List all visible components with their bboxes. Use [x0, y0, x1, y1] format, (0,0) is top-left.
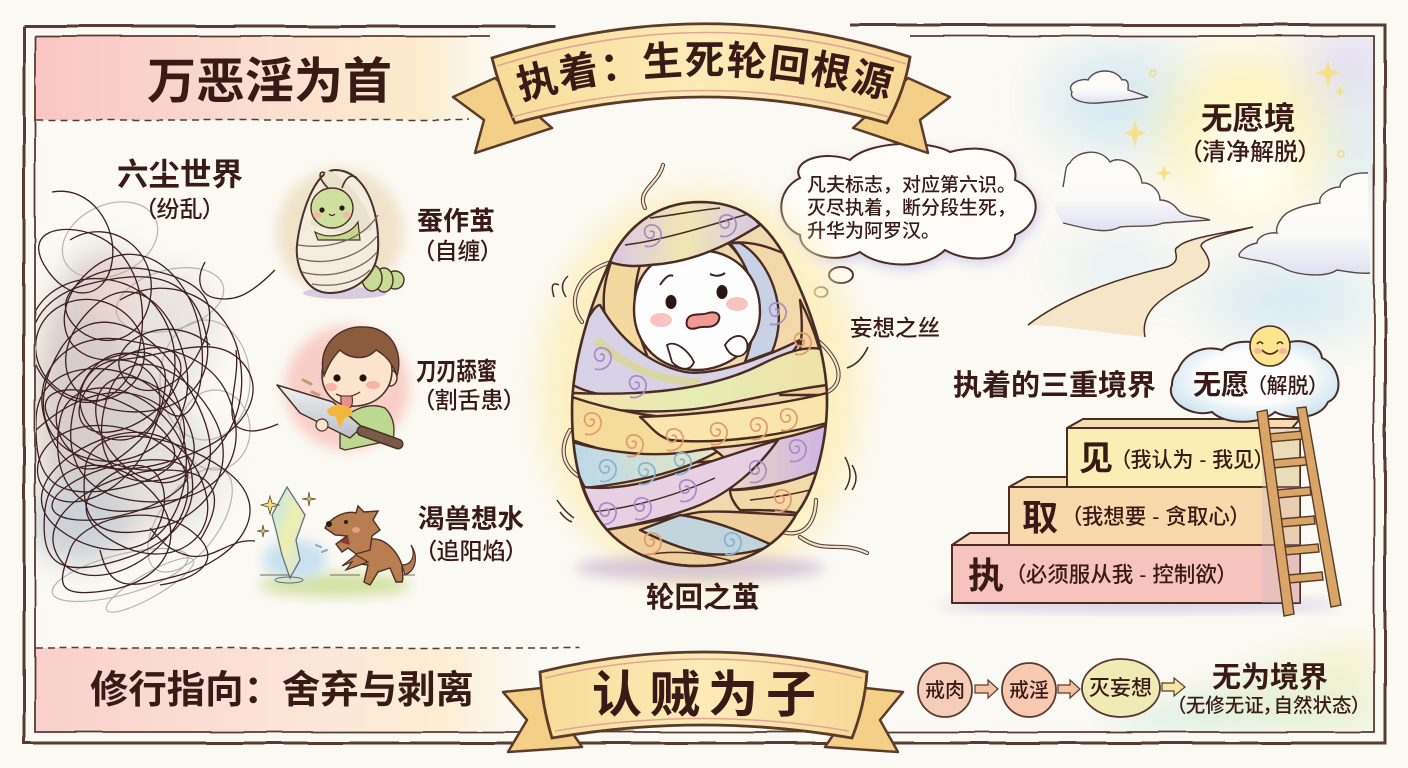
- label: silkworm: （自缠）: [423, 238, 492, 264]
- label: thirsty beast: [418, 504, 524, 564]
- cloud: no-wish liberation: 无愿: [1193, 369, 1249, 400]
- panel: six dusts scribble: [21, 187, 278, 620]
- step: no meat: [918, 663, 972, 717]
- face: [634, 250, 760, 370]
- step text: grasp: 取: [1022, 497, 1058, 538]
- loose threads: [564, 165, 867, 553]
- icon: thirsty beast and mirage: [257, 487, 415, 597]
- banner: top title: [452, 22, 952, 154]
- step text: grasp: （我想要 - 贪取心）: [1071, 505, 1241, 529]
- label: cocoon: 轮回之茧: [646, 582, 760, 614]
- cocoon bands: [573, 203, 826, 565]
- clouds: [1053, 71, 1370, 275]
- step text: see: 见: [1079, 440, 1113, 478]
- label: thirsty beast: 渴兽想水: [418, 504, 524, 534]
- callout: thought bubble: 凡夫标志，对应第六识。: [807, 174, 1016, 196]
- result: non-action realm: [1176, 661, 1361, 717]
- step: no lust: 戒淫: [1009, 679, 1049, 702]
- label: silkworm: [417, 206, 495, 264]
- step text: hold: 执: [968, 555, 1004, 596]
- icon: boy licking knife: [277, 326, 409, 450]
- label: silkworm: 蚕作茧: [417, 206, 495, 236]
- callout: thought bubble: [781, 144, 1038, 297]
- step: end delusion: [1082, 659, 1160, 717]
- cloud: no-wish liberation: （解脱）: [1256, 375, 1319, 398]
- cocoon outline: [572, 202, 827, 566]
- step text: hold: [968, 555, 1228, 596]
- panel: no-wish realm sky: （清净解脱）: [1190, 139, 1310, 166]
- result: non-action realm: （无修无证，自然状态）: [1176, 694, 1361, 717]
- heading: six dusts: [117, 156, 243, 222]
- label: threads of delusion: 妄想之丝: [850, 316, 940, 341]
- heading: three realms of attachment: 执着的三重境界: [953, 369, 1156, 402]
- road: [1028, 227, 1253, 337]
- face features: [650, 273, 748, 329]
- callout: thought bubble: 灭尽执着，断分段生死，: [807, 197, 1016, 219]
- flow: practice steps: [918, 659, 1185, 717]
- label: knife honey: （割舌患）: [423, 387, 515, 413]
- arrow: [1162, 678, 1185, 696]
- label: knife honey: 刀刃舔蜜: [416, 358, 497, 386]
- step text: see: （我认为 - 我见）: [1120, 449, 1265, 472]
- label: thirsty beast: （追阳焰）: [425, 538, 517, 564]
- swirls: [585, 215, 811, 555]
- shake marks: [552, 276, 856, 522]
- step: end delusion: 灭妄想: [1089, 677, 1152, 700]
- icon: silkworm cocoon: [277, 169, 404, 299]
- title text: 执着：生死轮回根源: [516, 40, 894, 102]
- figure: samsara cocoon: [540, 165, 867, 590]
- banner text: 认贼为子: [592, 667, 824, 723]
- hands: [667, 336, 747, 369]
- banner: bottom: [503, 652, 903, 752]
- label: threads of delusion: [847, 316, 940, 368]
- step text: grasp: [1022, 497, 1241, 538]
- arrow: [1058, 680, 1080, 698]
- callout: thought bubble: 升华为阿罗汉。: [807, 220, 940, 242]
- cloud: no-wish liberation: [1171, 326, 1338, 422]
- heading: six dusts: 六尘世界: [117, 156, 243, 192]
- label: knife honey: [416, 358, 515, 413]
- heading: six dusts: （纷乱）: [145, 196, 214, 222]
- step text: hold: （必须服从我 - 控制欲）: [1015, 563, 1228, 587]
- step text: see: [1079, 440, 1265, 478]
- heading: top left: 万恶淫为首: [147, 55, 392, 109]
- step: no lust: [1002, 663, 1056, 717]
- sparkles: [1124, 60, 1346, 182]
- result: non-action realm: 无为境界: [1212, 661, 1328, 694]
- staircase of three realms: [940, 419, 1340, 612]
- step: no meat: 戒肉: [925, 679, 965, 702]
- heading: practice direction: 修行指向：舍弃与剥离: [90, 669, 474, 712]
- icon: ladder: [1257, 407, 1341, 616]
- label: no-wish realm: 无愿境: [1201, 100, 1296, 136]
- arrow: [975, 680, 998, 698]
- panel: no-wish realm sky: [1028, 60, 1370, 337]
- step blocks: [952, 419, 1300, 603]
